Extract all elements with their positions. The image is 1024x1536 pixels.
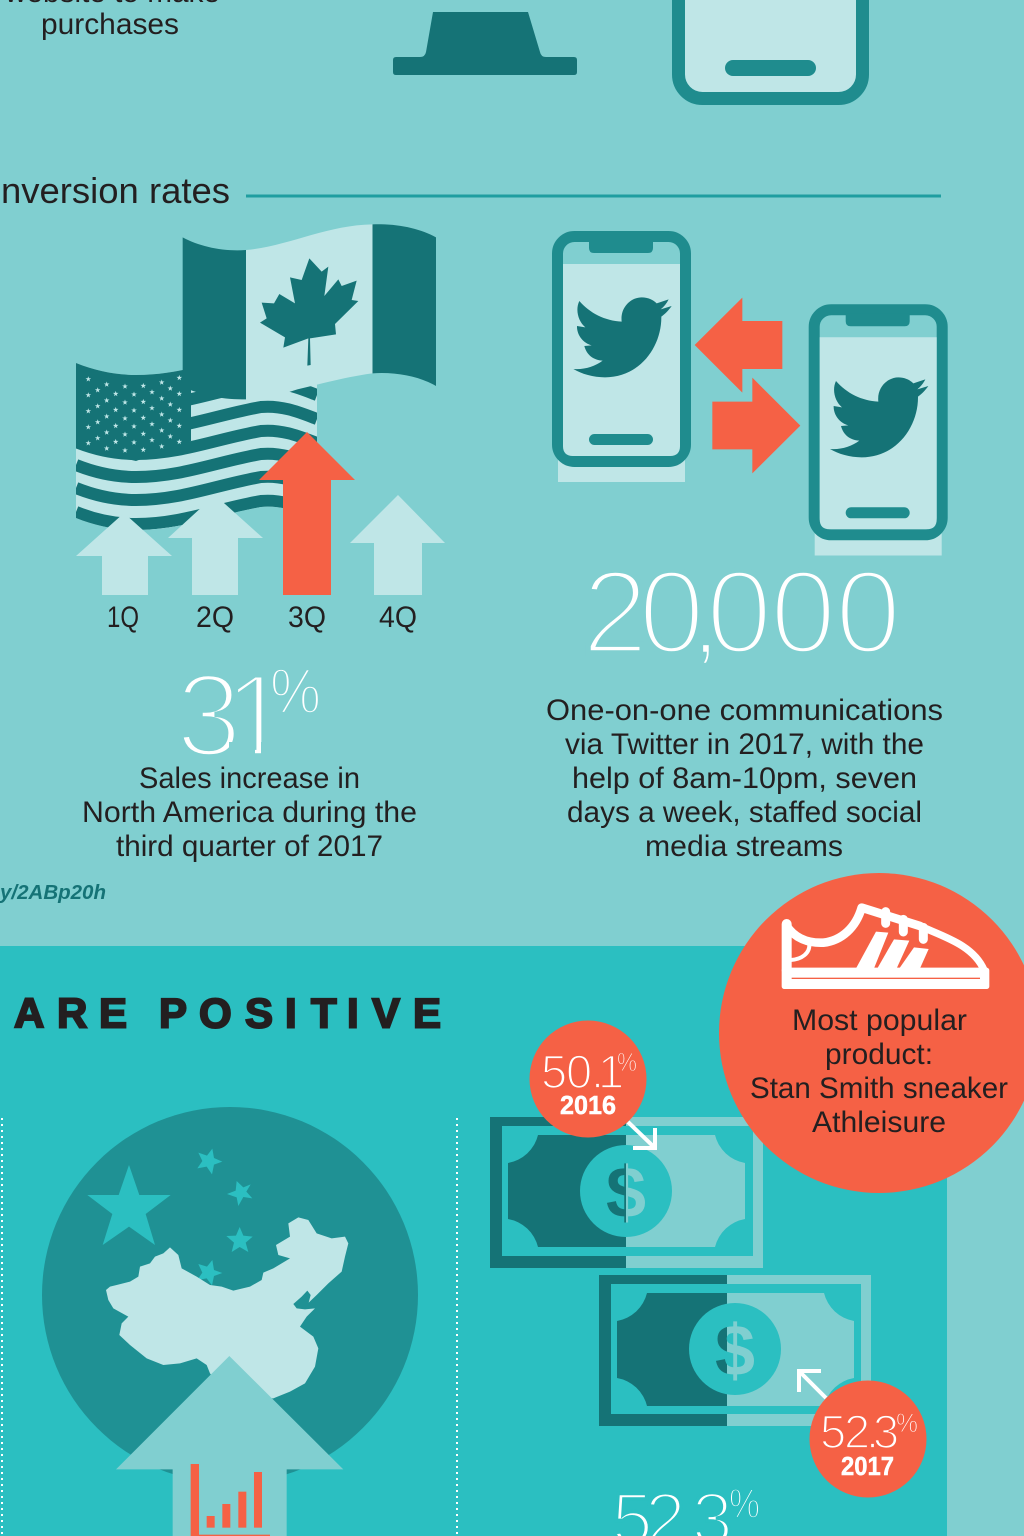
- panel: upper section background: [0, 0, 1024, 946]
- text: Twitter communications caption: One-on-one communications: [546, 694, 943, 727]
- callout: most popular product: Athleisure: [812, 1106, 946, 1139]
- icon: 2017 dollar bill: $: [715, 1311, 755, 1391]
- dotted column dividers: [2, 1118, 457, 1536]
- text: website purchases caption: purchases: [41, 8, 179, 41]
- chart: quarterly sales arrows: 3Q: [288, 601, 326, 634]
- panel: lower teal section: [0, 946, 947, 1536]
- chart: quarterly sales arrows: 4Q: [379, 601, 417, 634]
- callout: most popular product: [719, 873, 1024, 1193]
- text: sales increase caption: North America during the: [82, 796, 417, 829]
- text: sales increase caption: third quarter of 2017: [116, 830, 383, 863]
- icon: 2016 dollar bill: [490, 1117, 763, 1268]
- callout: 50.1 percent 2016: %: [617, 1047, 637, 1077]
- stat: 20,000: 20: [582, 546, 705, 679]
- callout: most popular product: Most popular: [792, 1004, 967, 1037]
- text: Twitter communications caption: [546, 694, 943, 863]
- icon: 2017 dollar bill: [599, 1275, 871, 1426]
- stat: 20,000: 000: [706, 546, 901, 679]
- icon: 2016 dollar bill: $: [606, 1153, 646, 1233]
- text: Twitter communications caption: media streams: [645, 830, 843, 863]
- text: Twitter communications caption: help of 8am-10pm, seven: [572, 762, 917, 795]
- icon: phone cropped at top: [678, 0, 862, 98]
- stat: 52.3 percent cropped at bottom: %: [729, 1480, 760, 1527]
- text: Twitter communications caption: days a week, staffed social: [567, 796, 922, 829]
- text: sales increase caption: Sales increase in: [139, 762, 360, 795]
- heading: are positive: ARE POSITIVE: [14, 990, 441, 1036]
- callout: 52.3 percent 2017: %: [896, 1408, 918, 1438]
- text: website purchases caption: [4, 0, 220, 41]
- chart: quarterly sales arrows: 1Q: [107, 601, 139, 634]
- text: sales increase caption: [82, 762, 417, 863]
- callout: 50.1 percent 2016: 2016: [560, 1090, 616, 1120]
- icon: flags of the US and Canada: [76, 224, 436, 560]
- callout: 52.3 percent 2017: [799, 1371, 926, 1498]
- icon: phones exchanging Twitter messages: [558, 236, 942, 556]
- icon: sneaker: [782, 908, 989, 989]
- text: source link: y/2ABp20h: [0, 882, 106, 904]
- callout: 52.3 percent 2017: 52.3: [820, 1405, 899, 1458]
- stat: 31 percent: 31: [176, 650, 290, 782]
- callout: 50.1 percent 2016: 50.1: [541, 1045, 624, 1098]
- callout: 50.1 percent 2016: [530, 1020, 655, 1148]
- callout: most popular product: product:: [825, 1038, 933, 1071]
- heading: conversion rates: nversion rates: [1, 170, 230, 211]
- chart: quarterly sales arrows: [76, 432, 445, 634]
- text: Twitter communications caption: via Twitter in 2017, with the: [565, 728, 924, 761]
- stat: 31 percent: [184, 670, 318, 754]
- callout: 52.3 percent 2017: 2017: [841, 1451, 894, 1481]
- stat: 31 percent: %: [270, 655, 321, 727]
- callout: most popular product: Stan Smith sneaker: [750, 1072, 1008, 1105]
- stat: 20,000: ,: [694, 577, 718, 672]
- icon: China map on flag circle with rising arrow: [42, 1107, 418, 1536]
- chart: quarterly sales arrows: 2Q: [196, 601, 234, 634]
- icon: stand shape: [393, 12, 577, 75]
